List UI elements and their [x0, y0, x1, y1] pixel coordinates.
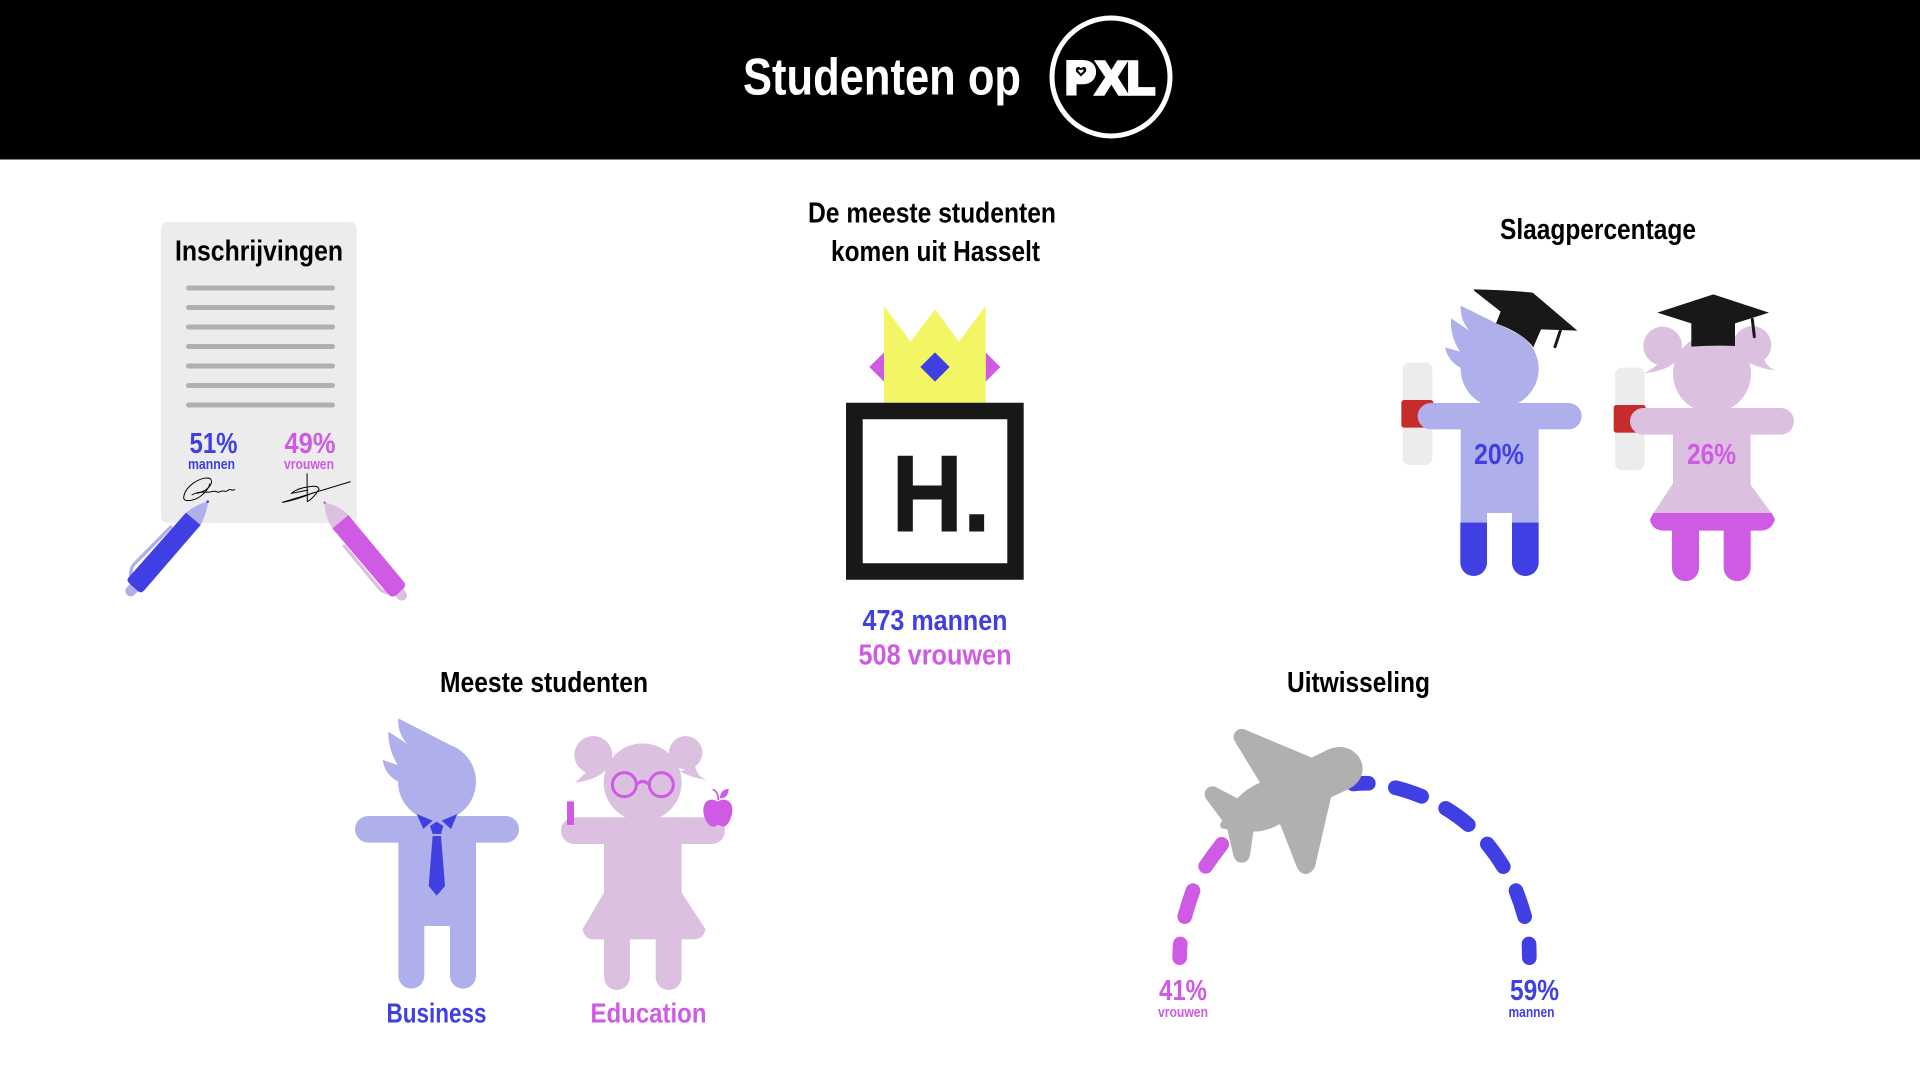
stat: 49% vrouwen	[284, 428, 336, 473]
stat: 51% mannen	[188, 428, 238, 473]
stat: 41% vrouwen	[1158, 975, 1208, 1021]
panel: uitwisseling	[1158, 667, 1559, 1021]
icon: pink pen	[323, 501, 405, 597]
PXL logo	[1052, 18, 1170, 136]
heading: hasselt	[808, 198, 1056, 268]
figure: education girl	[561, 736, 732, 990]
heading: inschrijvingen: Inschrijvingen	[175, 236, 343, 268]
stat: 41% vrouwen: vrouwen	[1158, 1004, 1208, 1021]
label: business: Business	[386, 998, 486, 1028]
stat: 59% mannen: mannen	[1508, 1004, 1554, 1021]
icon: crown	[869, 306, 1000, 403]
stat: 49% vrouwen: vrouwen	[284, 456, 334, 473]
stat: hasselt counts	[858, 605, 1012, 672]
stat: 41% vrouwen: 41%	[1159, 975, 1207, 1007]
icon: hasselt logo	[846, 403, 1024, 580]
stat: hasselt counts: 473 mannen	[862, 605, 1008, 637]
heading: uitwisseling: Uitwisseling	[1287, 667, 1430, 699]
heading: hasselt: komen uit Hasselt	[831, 236, 1040, 268]
panel: slaagpercentage	[1401, 214, 1794, 581]
PXL logo: PXL	[1065, 52, 1155, 104]
label: education: Education	[590, 998, 706, 1028]
panel: inschrijvingen	[127, 222, 405, 597]
signature: right	[282, 473, 351, 502]
icon: airplane	[1205, 729, 1363, 874]
title: Studenten op	[743, 48, 1021, 106]
heading: hasselt: De meeste studenten	[808, 198, 1056, 230]
panel: hasselt	[808, 198, 1056, 672]
document sheet	[161, 222, 357, 523]
flight path: vrouwen	[1180, 844, 1222, 958]
header band	[0, 0, 1920, 160]
stat: 59% mannen: 59%	[1510, 975, 1559, 1007]
stat: 26%: 26%	[1687, 439, 1736, 471]
flight path: mannen	[1353, 783, 1529, 958]
stat: 20%: 20%	[1474, 439, 1524, 471]
icon: hasselt logo: H.	[892, 433, 990, 555]
signature: left	[184, 478, 235, 501]
figure: graduating boy	[1401, 289, 1582, 576]
panel: meeste studenten	[355, 667, 732, 1028]
stat: 51% mannen: 51%	[190, 428, 238, 460]
stat: 49% vrouwen: 49%	[284, 428, 336, 460]
heading: meeste studenten: Meeste studenten	[440, 667, 648, 699]
figure: business boy	[355, 718, 519, 989]
heading: slaagpercentage: Slaagpercentage	[1500, 214, 1696, 246]
document text lines	[186, 286, 335, 408]
icon: blue pen	[127, 500, 209, 592]
figure: graduating girl	[1614, 294, 1794, 581]
stat: 51% mannen: mannen	[188, 456, 235, 473]
stat: hasselt counts: 508 vrouwen	[858, 640, 1012, 672]
stat: 59% mannen	[1508, 975, 1559, 1021]
